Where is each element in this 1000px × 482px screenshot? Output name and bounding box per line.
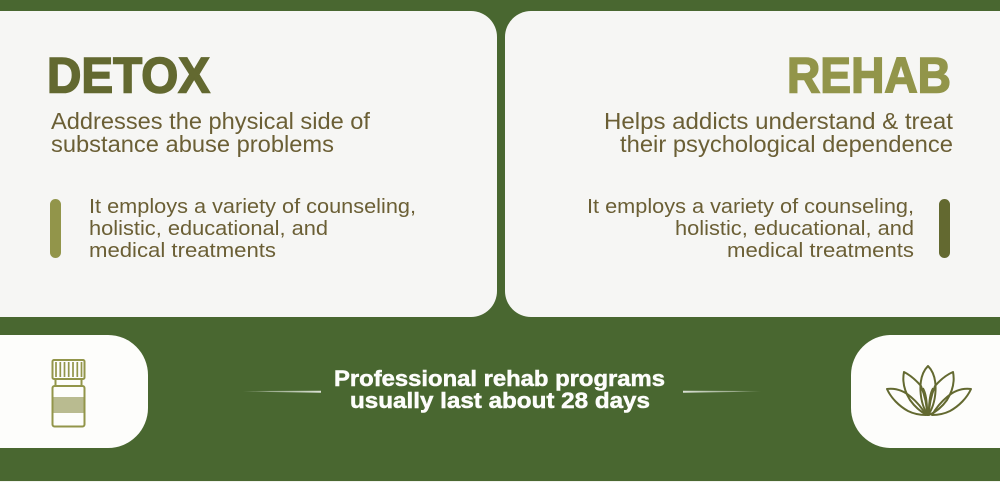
panel: rehab xyxy=(505,11,1000,317)
heading: REHAB: REHAB xyxy=(787,48,951,104)
callout: program length: usually last about 28 days xyxy=(350,388,650,413)
accent bar: rehab xyxy=(939,199,950,258)
divider: left rule xyxy=(243,391,321,393)
icon: medicine bottle xyxy=(52,360,84,426)
text: detox details: holistic, educational, and xyxy=(89,218,328,240)
panel: bottle pill xyxy=(0,335,148,448)
text: rehab details: medical treatments xyxy=(727,240,914,262)
panel: lotus pill xyxy=(851,335,1000,448)
accent bar: detox xyxy=(50,199,61,258)
heading: DETOX: DETOX xyxy=(47,48,210,104)
text: detox description: Addresses the physical side of xyxy=(51,108,371,134)
text: detox details: medical treatments xyxy=(89,240,276,262)
text: detox description: substance abuse problems xyxy=(51,131,334,157)
icon: lotus xyxy=(887,366,971,415)
text: detox description xyxy=(51,108,371,157)
panel: detox xyxy=(0,11,497,317)
divider: right rule xyxy=(683,391,761,393)
text: rehab description: their psychological dependence xyxy=(620,131,953,157)
callout: program length: Professional rehab programs xyxy=(334,366,665,391)
callout: program length xyxy=(334,366,665,413)
text: detox details: It employs a variety of counseling, xyxy=(89,196,416,218)
text: rehab details: It employs a variety of counseling, xyxy=(587,196,914,218)
text: rehab description xyxy=(604,108,954,157)
text: rehab details xyxy=(587,196,914,262)
text: rehab details: holistic, educational, and xyxy=(675,218,914,240)
text: rehab description: Helps addicts understand & treat xyxy=(604,108,954,134)
text: detox details xyxy=(89,196,416,262)
